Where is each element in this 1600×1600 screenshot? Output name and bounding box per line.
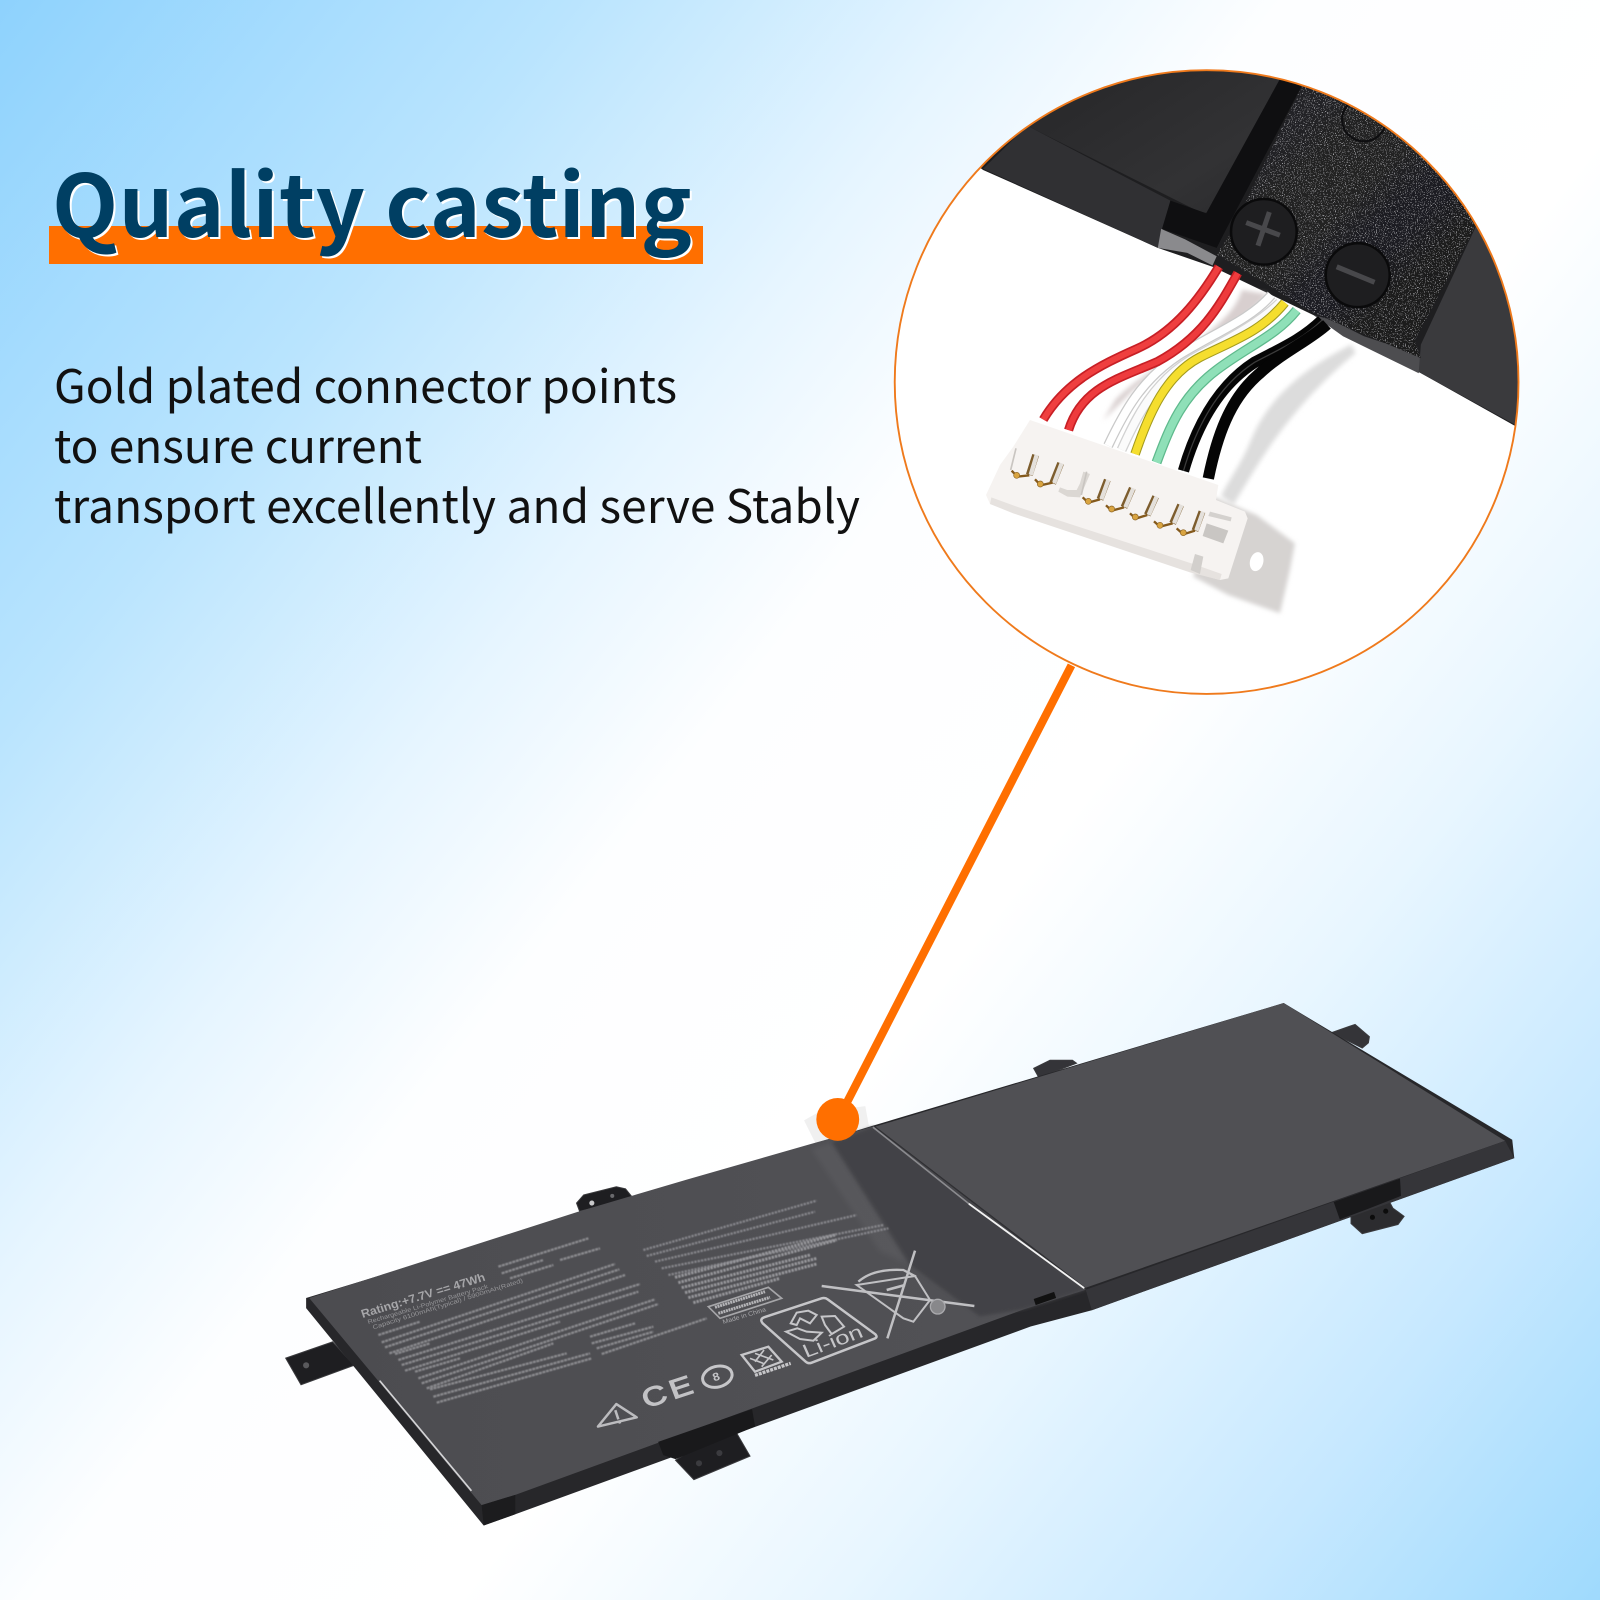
- white wire connector: [986, 420, 1295, 613]
- label: right block and icons: [637, 1201, 974, 1414]
- warning lines: [378, 1238, 707, 1403]
- textured end plate: [1217, 86, 1474, 358]
- connector shadow: [1193, 497, 1295, 613]
- tab mounting holes: [303, 1194, 1388, 1466]
- left label panel: [309, 1127, 1086, 1505]
- rating heading: Rating:+7.7V == 47Wh: [359, 1270, 487, 1321]
- wire shadows: [1221, 345, 1356, 505]
- battery mounting tabs: [286, 1024, 1404, 1480]
- orange callout line: [841, 665, 1071, 1114]
- right side strip shade: [1086, 1141, 1514, 1310]
- white connector peeking behind battery: [804, 1106, 869, 1145]
- icon: crossed-out bin: [822, 1251, 974, 1338]
- description text: [54, 351, 860, 537]
- battery description lines: Capacity 6100mAh(Typical) / 5900mAh(Rated): [372, 1278, 524, 1331]
- right battery cell: [876, 1003, 1505, 1288]
- full battery: [286, 665, 1514, 1526]
- polarity screws: [1231, 98, 1390, 307]
- recess behind lower right tab: [1334, 1179, 1401, 1219]
- battery body in close-up: [980, 71, 1518, 426]
- icon: warning triangle: [598, 1404, 637, 1427]
- recess behind lower left tab: [658, 1409, 755, 1459]
- orange callout dot: [816, 1098, 859, 1141]
- magnified connector circle: [880, 50, 1553, 694]
- battery base and side strip: [306, 1003, 1514, 1526]
- slot: [1034, 1292, 1056, 1305]
- icon: circled 8: [700, 1363, 735, 1391]
- made in china box: [708, 1287, 782, 1326]
- description text: to ensure current: [54, 411, 422, 477]
- description text: transport excellently and serve Stably: [54, 471, 860, 537]
- caution lines: [643, 1201, 888, 1303]
- battery description lines: Rechargeable Li-Polymer Battery Pack: [367, 1283, 490, 1326]
- edge highlight: [380, 1381, 471, 1491]
- seam between cells: [873, 1128, 1084, 1288]
- icon: Li-ion recycle box: [761, 1298, 877, 1363]
- made in china box: Made in China: [722, 1307, 767, 1326]
- coloured wires: [1043, 267, 1327, 478]
- icon: circled 8: 8: [711, 1369, 722, 1384]
- corner block: [482, 1495, 515, 1526]
- orange highlight bar: [49, 226, 703, 264]
- darker film band: [832, 1127, 1086, 1316]
- circle outline: [895, 70, 1519, 694]
- connector body: [986, 420, 1248, 580]
- icon: PSE mark: [742, 1347, 791, 1375]
- film sheen: [811, 1143, 910, 1265]
- label: left text block: [359, 1238, 707, 1403]
- icon: Li-ion recycle box: Li-ion: [799, 1322, 866, 1362]
- title: Quality casting: [52, 137, 692, 262]
- description text: Gold plated connector points: [54, 351, 677, 417]
- icon: CE mark: CE: [637, 1370, 697, 1414]
- gold connector pins: [1011, 448, 1203, 536]
